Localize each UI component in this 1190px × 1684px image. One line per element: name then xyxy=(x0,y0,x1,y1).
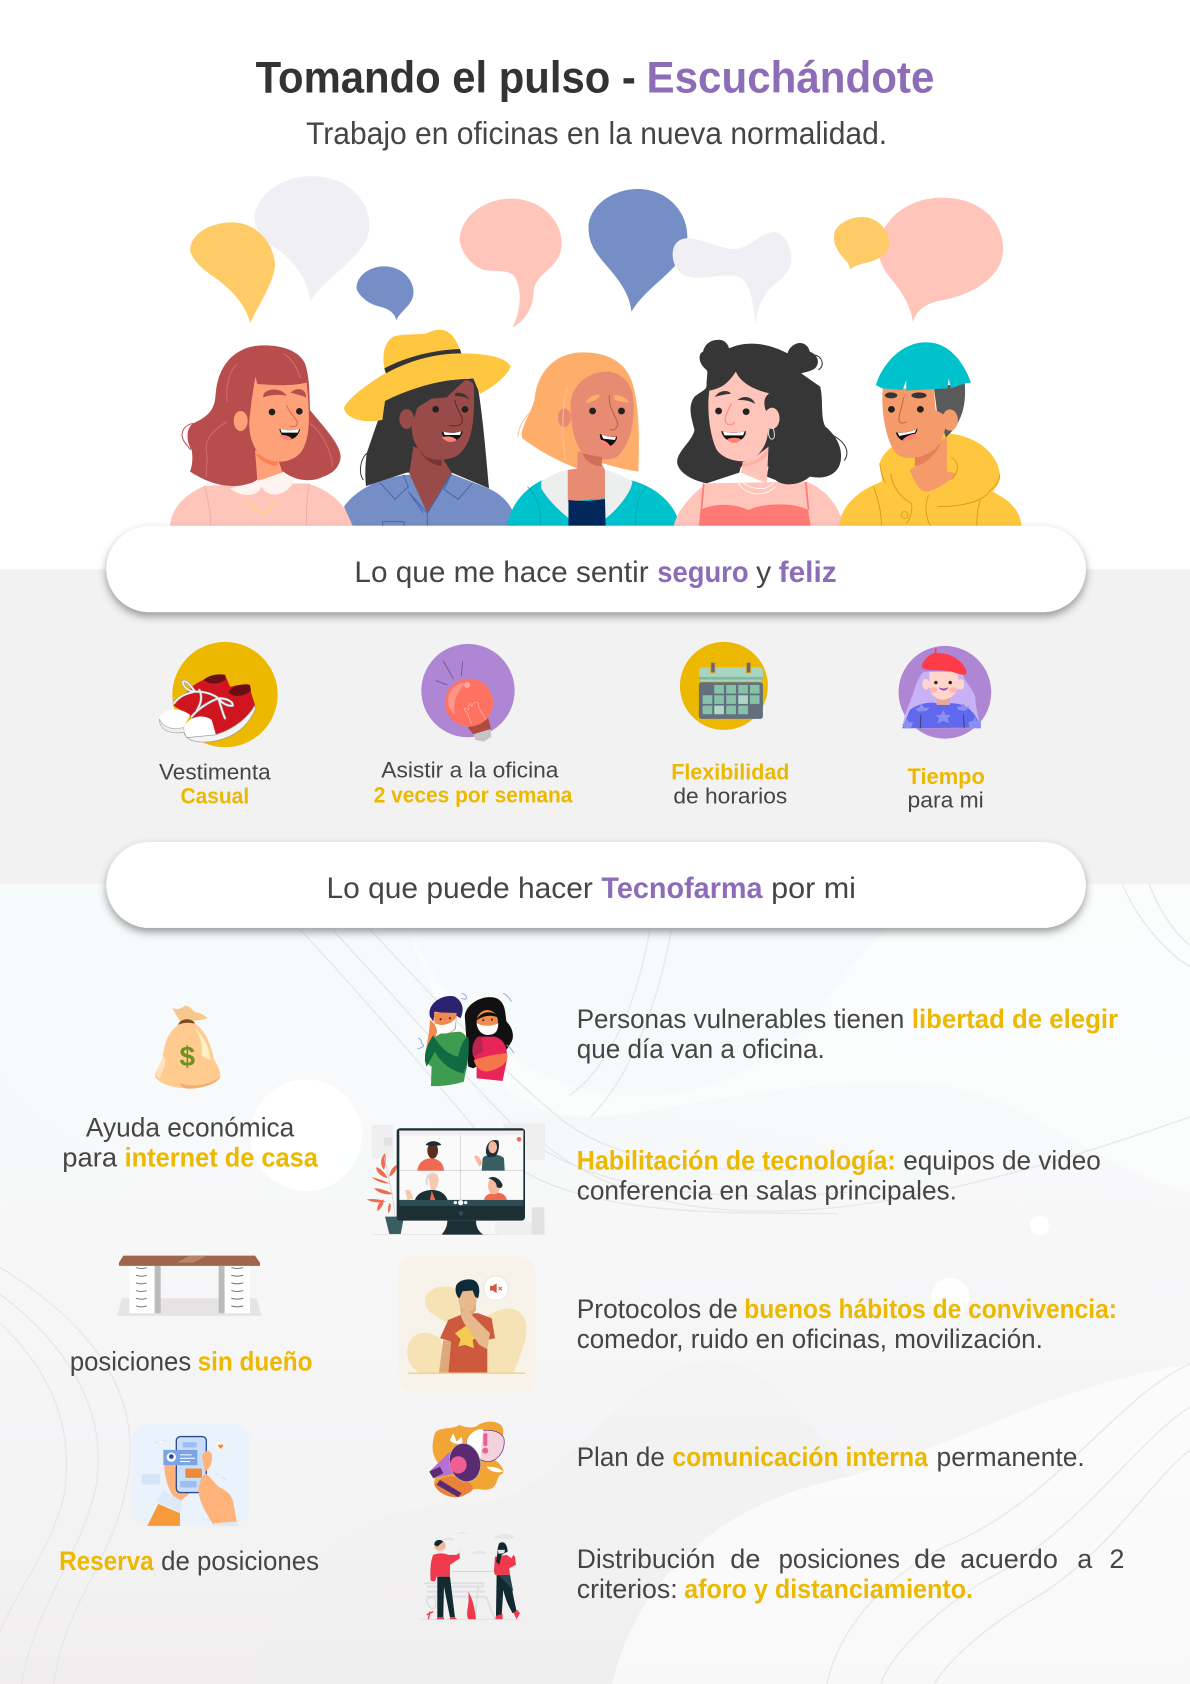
person 5: teal cap xyxy=(839,342,1022,526)
label: flexibilidad de horarios xyxy=(671,760,789,808)
text: reserva de posiciones: Reserva xyxy=(59,1546,155,1576)
text: protocolos de convivencia: Protocolos de xyxy=(577,1294,738,1324)
text: protocolos de convivencia: comedor, ruido en oficinas, movilización. xyxy=(577,1324,1043,1354)
text: plan de comunicación xyxy=(577,1442,1085,1472)
text: ayuda económica: internet de casa xyxy=(125,1142,319,1172)
title xyxy=(256,53,934,102)
label: asistir a la oficina: 2 veces por semana xyxy=(374,782,573,807)
icon: girl with red beret xyxy=(899,646,991,739)
pill heading: Tecnofarma: Lo que puede hacer xyxy=(327,872,593,905)
text: posiciones sin dueño: sin dueño xyxy=(198,1346,313,1376)
text: distribución de posiciones: a xyxy=(1077,1544,1092,1574)
illustration: phone in hands tile xyxy=(132,1424,250,1526)
pill heading: Tecnofarma xyxy=(106,842,1086,928)
text: plan de comunicación: comunicación interna xyxy=(672,1442,929,1472)
text: protocolos de convivencia xyxy=(577,1294,1117,1354)
label: tiempo para mi: Tiempo xyxy=(908,764,985,789)
text: distribución de posiciones: Distribución xyxy=(577,1544,715,1574)
subtitle: Trabajo en oficinas en la nueva normalidad. xyxy=(306,116,887,151)
label: asistir a la oficina: Asistir a la oficina xyxy=(381,758,559,783)
icon: light bulb xyxy=(421,644,515,742)
text: distribución de posiciones: de xyxy=(730,1544,760,1574)
text: personas vulnerables xyxy=(577,1004,1119,1064)
illustration: masked couple xyxy=(417,993,514,1086)
illustration: video conference monitor xyxy=(367,1123,545,1235)
text: habilitación de tecnología: Habilitación de tecnología: xyxy=(577,1146,896,1176)
label: vestimenta casual xyxy=(159,760,271,808)
text: distribución de posiciones xyxy=(577,1544,1124,1604)
text: distribución de posiciones: criterios: xyxy=(577,1574,678,1604)
label: tiempo para mi: para mi xyxy=(908,788,984,813)
icon: money bag xyxy=(155,1006,220,1089)
text: ayuda económica: para xyxy=(62,1142,117,1172)
pill heading: seguro y feliz: y xyxy=(756,556,771,589)
title: Escuchándote xyxy=(647,53,934,102)
pill heading: seguro y feliz: Lo que me hace sentir xyxy=(354,556,649,589)
text: plan de comunicación: Plan de xyxy=(577,1442,665,1472)
group of five people xyxy=(170,330,1022,526)
person 2: yellow hat xyxy=(344,330,517,526)
label: vestimenta casual: Casual xyxy=(180,783,249,808)
text: personas vulnerables: libertad de elegir xyxy=(912,1004,1119,1034)
text: distribución de posiciones: acuerdo xyxy=(960,1544,1058,1574)
pill heading: Tecnofarma: Tecnofarma xyxy=(601,872,763,905)
label: asistir a la oficina xyxy=(374,758,573,807)
text: posiciones sin dueño: posiciones xyxy=(70,1346,191,1376)
pill heading: seguro y feliz: feliz xyxy=(779,556,837,589)
pill heading: Tecnofarma: por mi xyxy=(771,872,856,905)
text: distribución de posiciones: posiciones xyxy=(779,1544,900,1574)
illustration: desk xyxy=(117,1256,262,1316)
person 3: blonde hair xyxy=(507,352,680,526)
text: plan de comunicación: permanente. xyxy=(937,1442,1085,1472)
icon: money bag: $ xyxy=(179,1041,195,1072)
person 1: red hair xyxy=(170,345,353,526)
label: vestimenta casual: Vestimenta xyxy=(159,760,271,785)
text: personas vulnerables: Personas vulnerables tienen xyxy=(577,1004,904,1034)
person 4: black hair xyxy=(674,340,847,526)
pill heading: seguro y feliz xyxy=(106,526,1086,612)
text: personas vulnerables: que día van a oficina. xyxy=(577,1034,825,1064)
text: reserva de posiciones xyxy=(59,1546,319,1576)
text: distribución de posiciones: 2 xyxy=(1109,1544,1124,1574)
text: ayuda económica: Ayuda económica xyxy=(86,1112,294,1142)
icon: calendar xyxy=(680,642,768,730)
text: reserva de posiciones: de posiciones xyxy=(161,1546,319,1576)
text: habilitación de tecnología xyxy=(577,1146,1101,1206)
text: distribución de posiciones: aforo y distanciamiento. xyxy=(684,1574,973,1604)
pill heading: seguro y feliz: seguro xyxy=(657,556,749,589)
illustration: silence man tile xyxy=(398,1256,536,1393)
text: habilitación de tecnología: equipos de video xyxy=(903,1146,1101,1176)
text: protocolos de convivencia: buenos hábitos de convivencia: xyxy=(744,1294,1117,1324)
illustration: people keeping distance xyxy=(420,1532,522,1619)
illustration: megaphone xyxy=(429,1422,504,1497)
label: flexibilidad de horarios: de horarios xyxy=(673,783,787,808)
text: distribución de posiciones: de xyxy=(914,1544,946,1574)
speech bubbles xyxy=(190,176,1003,328)
text: ayuda económica xyxy=(62,1112,319,1172)
text: posiciones sin dueño xyxy=(70,1346,313,1376)
title: Tomando el pulso - xyxy=(256,53,636,102)
label: flexibilidad de horarios: Flexibilidad xyxy=(671,760,789,785)
icon: red sneakers xyxy=(159,642,278,747)
label: tiempo para mi xyxy=(908,764,985,813)
text: habilitación de tecnología: conferencia en salas principales. xyxy=(577,1176,957,1206)
